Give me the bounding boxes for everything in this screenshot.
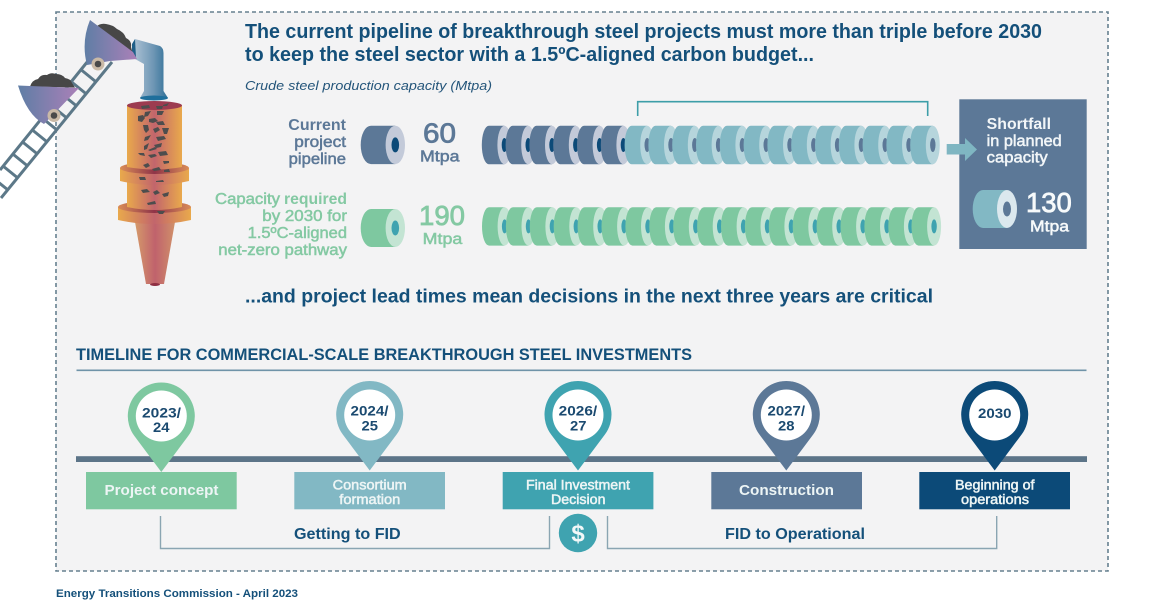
panel: shortfall [959, 99, 1087, 249]
title: The current pipeline of breakthrough steel projects must more than triple before 2030 [245, 21, 1042, 43]
pin: 2023/24: 24 [153, 420, 170, 435]
heading: lead times: ...and project lead times mean decisions in the next three years are critical [245, 286, 933, 308]
label box: Construction [739, 483, 834, 499]
text block: current pipeline label [288, 117, 347, 168]
pin: 2026/27: 2026/ [559, 404, 597, 419]
pin: 2030: 2030 [978, 406, 1012, 421]
pin: 2024/25 [336, 381, 403, 470]
pin: 2023/24: 2023/ [142, 406, 181, 420]
label box [919, 472, 1070, 509]
text block: shortfall label: capacity [987, 150, 1048, 166]
bracket: getting to FID: Getting to FID [294, 526, 401, 543]
text block: required capacity label: by 2030 for [262, 208, 347, 225]
icon: upper coal cart [85, 20, 137, 70]
label box [503, 472, 653, 509]
stat: 130 Mtpa: 130 [1026, 187, 1072, 218]
arrow: to shortfall [947, 138, 977, 161]
title [245, 21, 1042, 66]
heading: timeline: TIMELINE FOR COMMERCIAL-SCALE BREAKTHROUGH STEEL INVESTMENTS [76, 346, 692, 364]
label box [711, 472, 862, 509]
pin: 2030 [961, 381, 1028, 470]
icon: rocks in furnace [138, 103, 170, 214]
text block: current pipeline label: project [294, 134, 347, 151]
stat: 60 Mtpa [420, 118, 460, 166]
icon: pipeline cylinder [361, 126, 405, 164]
milestone: construction [711, 381, 862, 509]
pin: 2026/27 [544, 381, 612, 470]
stat: 130 Mtpa: Mtpa [1030, 219, 1069, 236]
label box: Decision [551, 492, 606, 507]
label box: operations [961, 492, 1029, 507]
milestone: project concept [86, 383, 237, 509]
stat: 60 Mtpa: Mtpa [420, 149, 460, 166]
pin: 2023/24 [128, 383, 195, 472]
milestone: final investment decision [503, 381, 653, 509]
stat: 190 Mtpa [419, 200, 465, 248]
milestone: consortium formation [294, 381, 445, 509]
text block: required capacity label [215, 191, 347, 259]
label box: Project concept [104, 483, 219, 499]
icon: required cylinder [361, 209, 405, 247]
label box: formation [339, 492, 400, 507]
text block: required capacity label: 1.5ºC-aligned [248, 225, 347, 242]
pictogram row: required capacity [482, 207, 941, 246]
pin: 2027/28: 28 [778, 419, 795, 434]
pin: 2024/25: 25 [362, 419, 379, 434]
icon: dollar [559, 514, 597, 552]
text block: current pipeline label: Current [288, 117, 346, 134]
label box: Consortium [333, 477, 407, 492]
title: to keep the steel sector with a 1.5ºC-aligned carbon budget... [245, 44, 814, 66]
icon: shortfall cylinder [973, 190, 1017, 228]
label box [86, 472, 237, 509]
icon: conveyor ladder [0, 56, 112, 198]
text block: shortfall label [987, 116, 1062, 166]
icon: dollar: $ [571, 520, 585, 548]
chart subtitle: Crude steel production capacity (Mtpa) [245, 78, 492, 93]
bracket: FID to operational [608, 516, 997, 548]
text block: required capacity label: net-zero pathway [218, 242, 347, 259]
timeline bar [76, 456, 1087, 462]
icon: feed chute [132, 39, 168, 100]
label box: Beginning of [955, 477, 1035, 492]
label box: Final Investment [526, 477, 630, 492]
bracket: shortfall span [638, 102, 928, 116]
icon: furnace body [118, 101, 191, 286]
stat: 190 Mtpa: 190 [419, 200, 465, 231]
stat: 130 Mtpa [1026, 187, 1072, 236]
bracket: getting to FID [160, 516, 550, 548]
stat: 60 Mtpa: 60 [423, 118, 456, 149]
text block: shortfall label: in planned [987, 133, 1062, 150]
pictogram row: current pipeline vs shortfall [482, 126, 940, 164]
illustration: blast furnace with coal carts [0, 20, 191, 286]
pin: 2027/28 [753, 381, 820, 470]
icon: lower coal cart [18, 73, 79, 124]
label box [294, 472, 445, 509]
text block: current pipeline label: pipeline [289, 151, 346, 168]
text block: shortfall label: Shortfall [987, 116, 1051, 133]
stat: 190 Mtpa: Mtpa [423, 231, 463, 248]
bracket: FID to operational: FID to Operational [725, 526, 865, 543]
text block: required capacity label: required [284, 191, 347, 208]
pin: 2026/27: 27 [570, 419, 586, 434]
footer: Energy Transitions Commission - April 2023 [56, 588, 298, 600]
text block: required capacity label: Capacity [215, 191, 280, 208]
milestone: beginning of operations [919, 381, 1070, 509]
pin: 2027/28: 2027/ [768, 404, 805, 419]
pin: 2024/25: 2024/ [350, 404, 389, 419]
